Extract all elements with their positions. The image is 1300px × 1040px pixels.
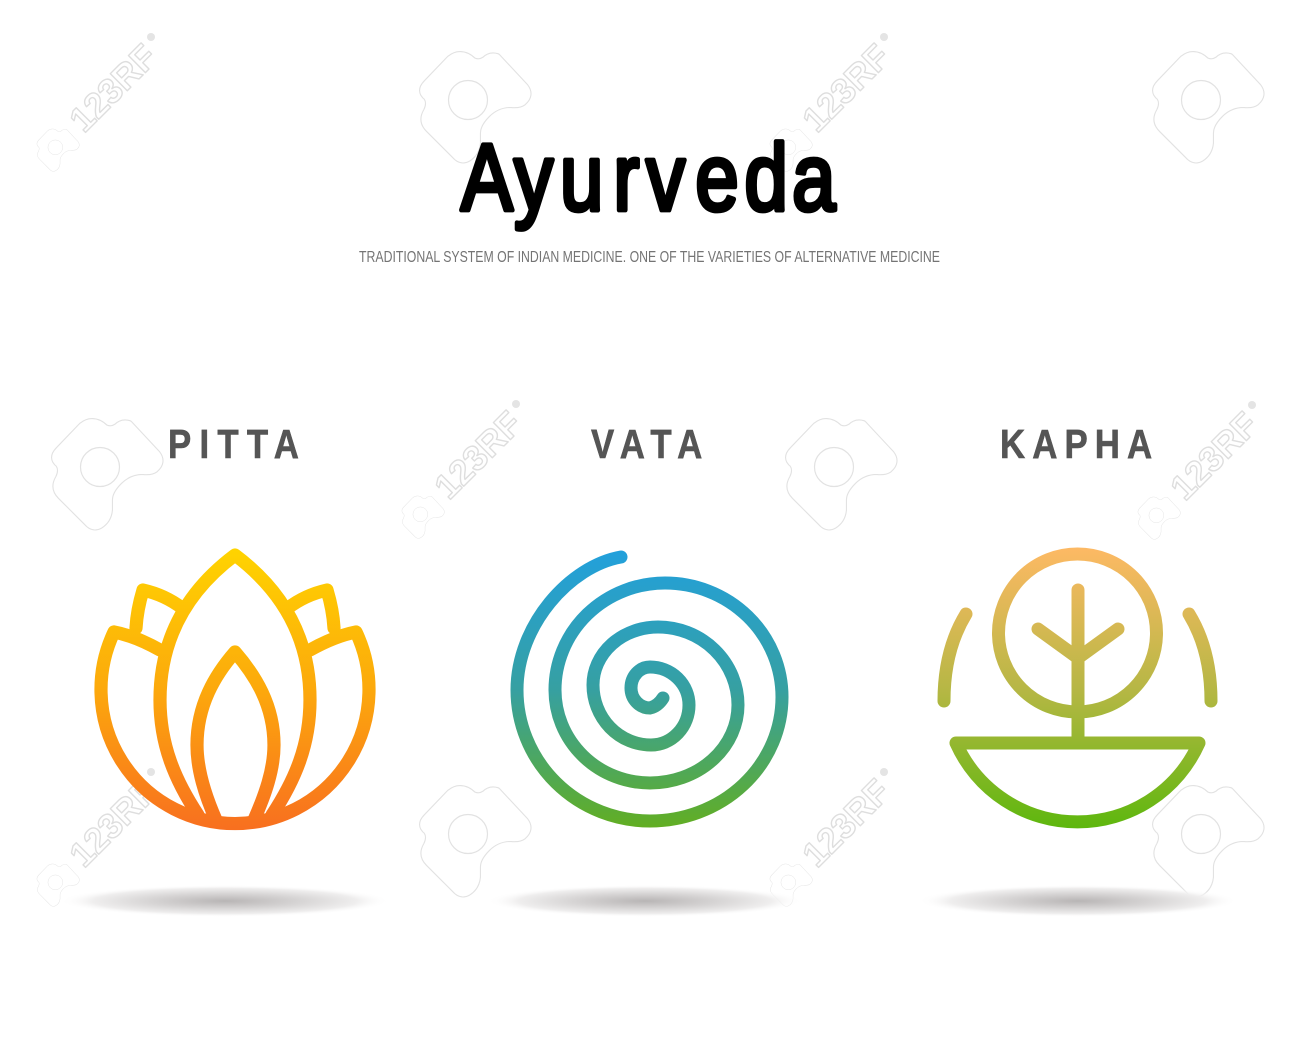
- heading: kapha: KAPHA: [1000, 422, 1152, 468]
- shadow: pitta: [60, 885, 390, 917]
- watermark: logo top centre: [771, 33, 898, 170]
- panel: vata: [487, 422, 803, 917]
- panel: kapha: [918, 422, 1238, 917]
- watermark: large stamps: [55, 55, 1261, 893]
- icon: tree in bowl: [944, 554, 1211, 822]
- watermark: logo middle left: [403, 400, 530, 537]
- watermark: logo middle left: 123RF: [427, 404, 530, 507]
- shadow: vata: [487, 885, 803, 917]
- heading: pitta: PITTA: [168, 422, 299, 468]
- watermark: logo bottom centre: 123RF: [795, 772, 898, 875]
- watermark: logo bottom left: [38, 768, 165, 905]
- watermark: logo middle right: [1139, 401, 1266, 538]
- watermark: logo middle right: 123RF: [1163, 405, 1266, 508]
- watermark: logo top centre: 123RF: [795, 37, 898, 140]
- icon: spiral: [517, 557, 782, 821]
- title: Ayurveda: [461, 125, 836, 231]
- watermark: logo bottom left: 123RF: [62, 772, 165, 875]
- panel: pitta: [60, 422, 390, 917]
- watermark: logo top left: 123RF: [62, 37, 165, 140]
- watermark: logo bottom centre: [771, 768, 898, 905]
- heading: vata: VATA: [591, 422, 702, 468]
- subtitle: TRADITIONAL SYSTEM OF INDIAN MEDICINE. ONE OF THE VARIETIES OF ALTERNATIVE MEDICINE: [359, 249, 940, 266]
- watermark: logo top left: [38, 33, 165, 170]
- icon: lotus: [101, 555, 369, 824]
- shadow: kapha: [918, 885, 1238, 917]
